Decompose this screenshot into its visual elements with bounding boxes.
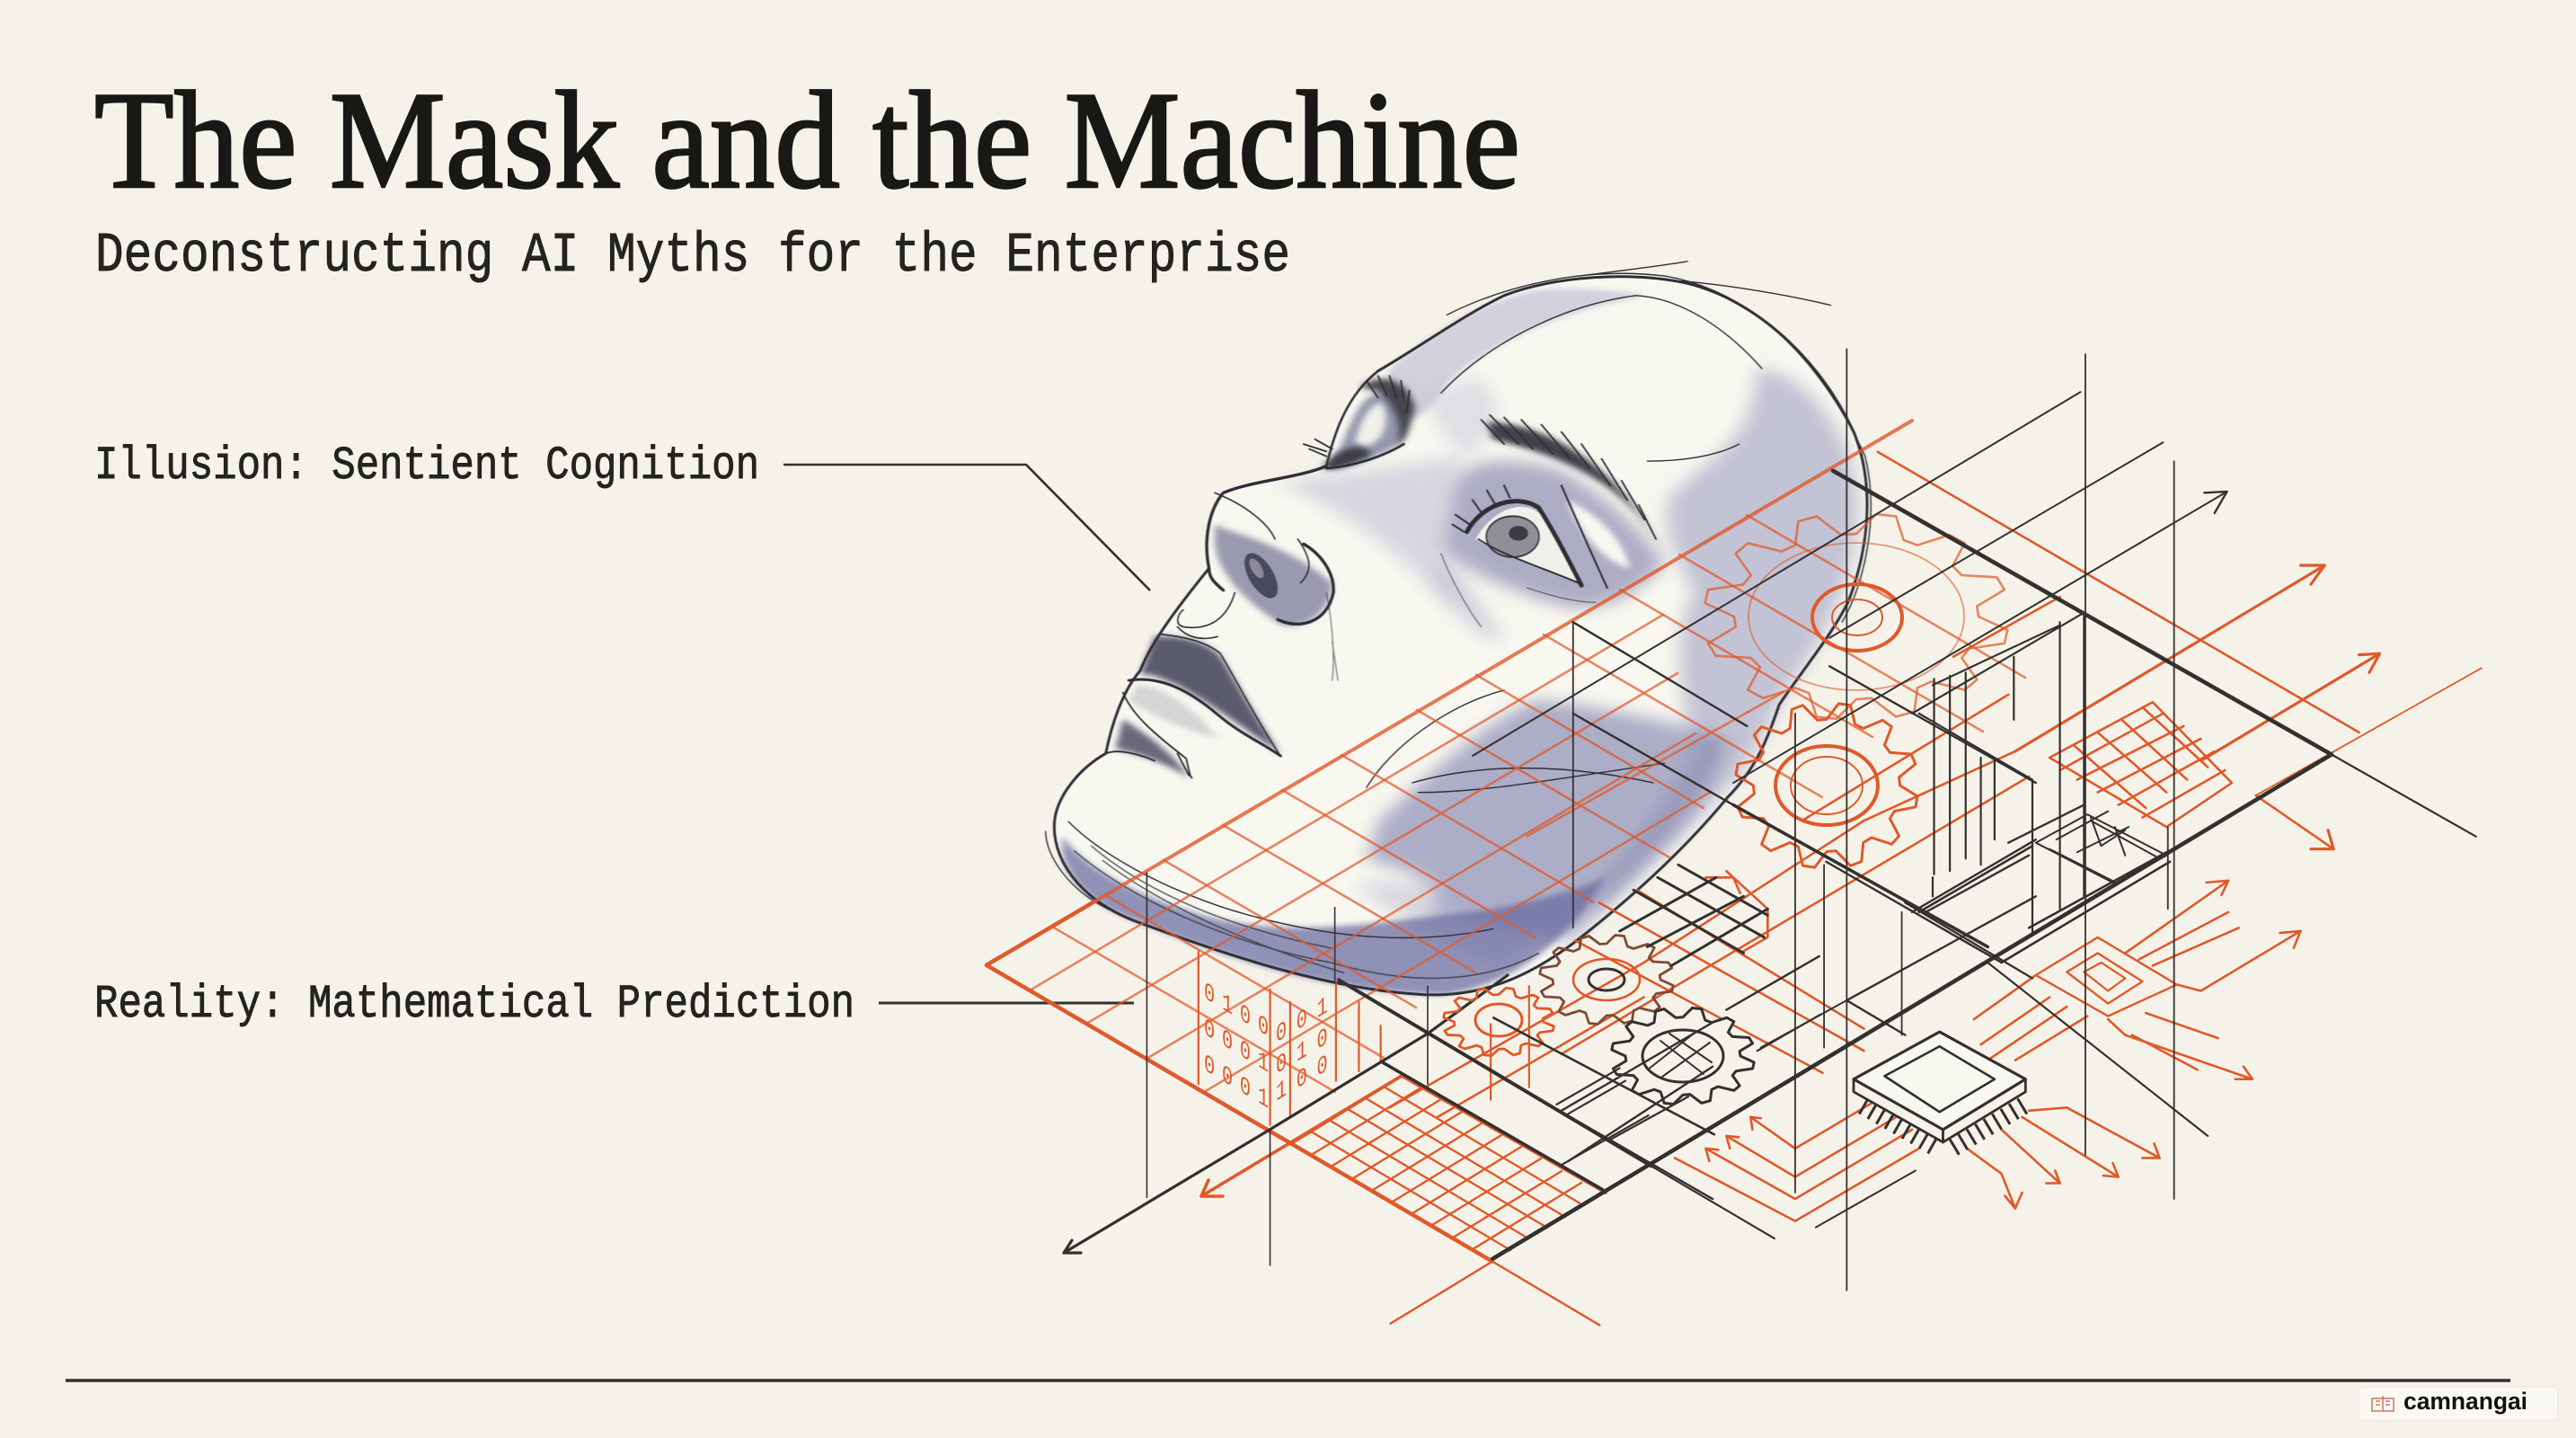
gear: small orange — [1444, 988, 1554, 1056]
binary digits: 0 1 0 — [1276, 1022, 1328, 1082]
wash: jaw shadow — [1062, 837, 1607, 995]
orange grid right — [2049, 702, 2232, 827]
lower left bars — [1438, 1067, 1713, 1199]
binary digits: 0 0 1 — [1276, 990, 1328, 1051]
dark structure lines — [1146, 349, 2476, 1291]
eye — [1475, 507, 1579, 583]
binary digits — [1204, 976, 1328, 1116]
chip — [1854, 1032, 2025, 1150]
orange fine mesh — [1293, 1076, 1606, 1250]
binary digits: 0 1 0 0 — [1204, 976, 1269, 1044]
gear: faint top orange — [1705, 514, 2007, 719]
wash: lower cheek — [1367, 700, 1728, 938]
lower left section: orange grid, binary block and axis arrows — [987, 901, 1606, 1325]
wash: side of head — [1584, 368, 1858, 919]
arrow: orange lower left — [1201, 1076, 1402, 1196]
gear: large orange — [1736, 704, 1917, 867]
orange chip traces — [2125, 881, 2228, 953]
badge text: camnangai — [2403, 1388, 2527, 1415]
chip orange arrows — [2029, 1107, 2160, 1158]
icon: open book — [2372, 1396, 2394, 1411]
callout: illusion — [94, 439, 1150, 590]
nose — [1237, 549, 1285, 602]
callout: illusion: Illusion: Sentient Cognition — [94, 439, 759, 493]
title: The Mask and the Machine — [94, 63, 1520, 217]
wash: lips — [1140, 636, 1280, 753]
gears — [1444, 514, 2007, 1104]
wash: forehead — [1384, 288, 1647, 419]
small lattice right — [2036, 812, 2166, 883]
verticals — [1573, 349, 2174, 1291]
baseline rule — [66, 1379, 2510, 1382]
mouth — [1129, 679, 1280, 756]
chevron traces — [1750, 1079, 1912, 1149]
binary digits: 1 0 0 — [1276, 1049, 1328, 1109]
near eyebrow — [1487, 422, 1665, 554]
arrow: dark lower left — [1064, 975, 1508, 1253]
wash: eye socket — [1441, 461, 1665, 608]
far eyebrow — [1359, 378, 1415, 444]
callout: reality: Reality: Mathematical Prediction — [94, 978, 854, 1031]
binary digits: 0 0 0 1 — [1204, 1012, 1269, 1080]
barred box — [1912, 613, 2084, 934]
badge: camnangai — [2359, 1387, 2558, 1421]
gear: medium orange — [1540, 935, 1673, 1025]
binary digits: 0 0 0 1 — [1204, 1048, 1269, 1116]
pencil outline — [1046, 262, 1871, 995]
small lattice left — [1620, 865, 1767, 965]
isometric plate: orange grid lines — [987, 421, 2025, 1092]
illustration: watercolor face — [1046, 262, 1871, 995]
gear: dark — [1612, 1008, 1754, 1104]
wash: nose — [1215, 525, 1332, 626]
orange traces — [1389, 452, 2482, 1221]
right section: structure, gears, chips and traces — [1146, 349, 2482, 1291]
subtitle: Deconstructing AI Myths for the Enterprise — [95, 224, 1290, 288]
wash: far eye socket — [1326, 393, 1403, 468]
orange plate outline — [987, 901, 1599, 1325]
